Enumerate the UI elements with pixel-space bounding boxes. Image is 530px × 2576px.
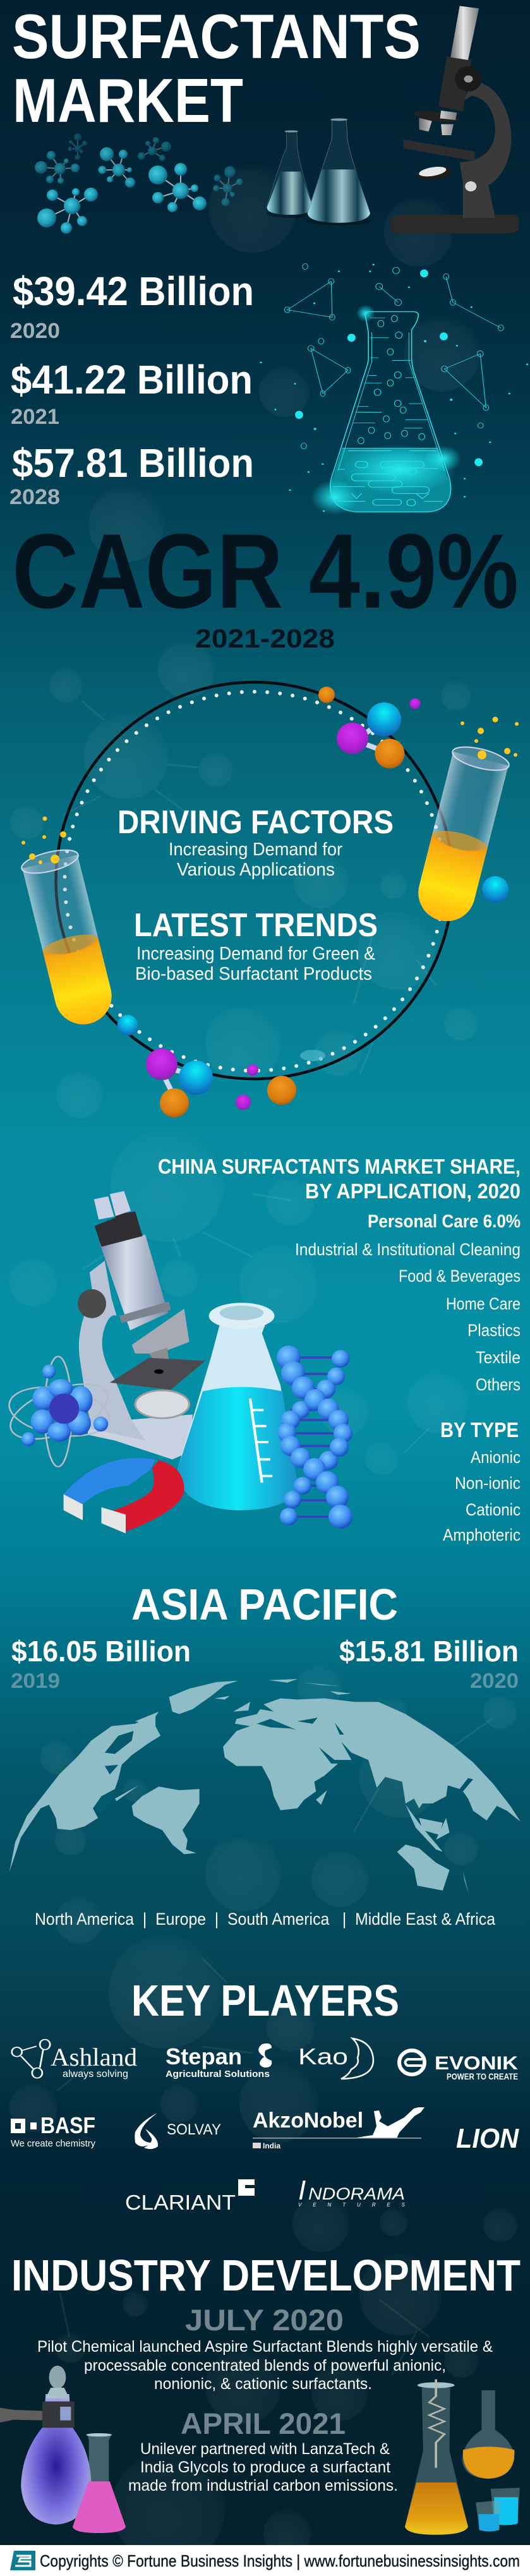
stage [110, 1358, 205, 1390]
pivot [465, 181, 476, 191]
date: July 2020: JULY 2020 [185, 2303, 344, 2337]
atom electrons [21, 1364, 108, 1446]
North America [9, 1714, 160, 1872]
application list [295, 1240, 521, 1394]
flask liquid [178, 1387, 298, 1510]
heading: key players: KEY PLAYERS [131, 1976, 399, 2025]
panel: factors ring [20, 682, 519, 1117]
molecule 7 [213, 166, 243, 206]
text: April 2021: made from industrial carbon emissions. [128, 2477, 398, 2495]
value: 2021: 2021 [11, 405, 59, 429]
value: 2020: 2020 [470, 1669, 519, 1692]
Caribbean [115, 1785, 138, 1801]
text: July 2020: processable concentrated blends of powerful anionic, [84, 2357, 446, 2374]
mirror [416, 164, 455, 183]
yellow droplets [21, 716, 519, 864]
tube band [119, 1301, 171, 1323]
knob centre [464, 75, 473, 83]
text: April 2021: Unilever partnered with LanzaTech & [140, 2440, 390, 2458]
illustration: left glassware [0, 2366, 126, 2533]
world map [9, 1679, 521, 1894]
eyepieces [94, 1191, 131, 1220]
right flask [307, 118, 371, 226]
Arctic islands [135, 1679, 399, 1724]
value: 2019 [11, 1635, 191, 1692]
molecule 1 [37, 188, 98, 234]
flask rim [209, 1303, 274, 1329]
logo: Indorama: V E N T U R E S [298, 2202, 406, 2208]
flask [178, 1325, 298, 1510]
molecule 5 [138, 137, 171, 161]
value: 2020 [339, 1635, 519, 1692]
logo: Solvay [135, 2113, 221, 2149]
footer bar [0, 2545, 530, 2576]
value: 2028: 2028 [9, 485, 60, 509]
molecule 4 [35, 151, 80, 184]
text: April 2021: India Glycols to produce a surfactant [140, 2459, 390, 2476]
application list: Plastics [467, 1321, 521, 1340]
logo: Stepan: Agricultural Solutions [166, 2069, 270, 2079]
heading: China share [158, 1155, 521, 1203]
logo: Ashland: Ashland [51, 2043, 137, 2071]
value: 2020 [10, 268, 254, 343]
logo: Indorama [298, 2175, 406, 2208]
black tube [438, 56, 471, 112]
clamp [0, 2402, 75, 2428]
atom nucleus [31, 1379, 93, 1441]
type list: Cationic [466, 1500, 521, 1519]
inland seas [95, 1718, 344, 1813]
application list: Textile [476, 1348, 521, 1367]
liquid [330, 448, 451, 512]
objective [148, 1348, 169, 1365]
atoms [117, 687, 509, 1110]
logo: Clariant [125, 2179, 255, 2214]
heading: latest trends: LATEST TRENDS [134, 907, 378, 944]
ring [56, 682, 452, 1079]
application list: Others [476, 1375, 521, 1394]
molecule 6 [68, 133, 87, 160]
eyepiece collar [95, 1212, 143, 1247]
value: 2028 [9, 440, 254, 509]
icon: right test tube [412, 742, 511, 927]
base [390, 215, 519, 234]
light [135, 1390, 190, 1418]
value: 2019: $16.05 Billion [11, 1635, 191, 1668]
logo: Indorama: NDORAMA [308, 2184, 405, 2203]
Africa [223, 1724, 338, 1810]
round flask [462, 2390, 514, 2479]
text: latest trends: Increasing Demand for Green & [136, 944, 375, 964]
value: 2020: 2020 [10, 319, 60, 343]
SE Asia islands [406, 1805, 450, 1852]
Eurasia [235, 1699, 521, 1822]
logo: Indorama: I [298, 2175, 306, 2206]
microscope base [88, 1414, 193, 1459]
text: July 2020: nonionic, & cationic surfactants. [154, 2375, 372, 2393]
heading: driving factors: DRIVING FACTORS [117, 804, 394, 841]
New Zealand [463, 1871, 469, 1894]
title [12, 1, 421, 135]
flask mouth [220, 1306, 263, 1320]
logo: AkzoNobel [253, 2107, 425, 2150]
icon: glass flasks [267, 118, 371, 226]
magnet [64, 1458, 184, 1533]
icon: molecules [35, 133, 243, 234]
molecule: bottom [146, 1049, 213, 1117]
icon: neon flask [260, 263, 528, 515]
icon: footer logo [10, 2551, 35, 2570]
logo: Stepan: Stepan [166, 2043, 242, 2069]
type list [443, 1448, 521, 1544]
stage hole [154, 1369, 164, 1374]
heading: by type: BY TYPE [440, 1418, 519, 1441]
CAGR period: 2021-2028 [195, 623, 335, 653]
panel: China market share list [158, 1155, 521, 1544]
flask scale [250, 1399, 272, 1483]
microscope arm [79, 1261, 145, 1441]
pink flask [73, 2433, 126, 2533]
date: April 2021: APRIL 2021 [181, 2407, 346, 2440]
type list: Anionic [471, 1448, 521, 1467]
logo: Ashland: always solving [63, 2069, 128, 2079]
focus knob [78, 1289, 106, 1318]
dotted ring [64, 692, 443, 1071]
arm [460, 81, 511, 218]
purple flask [21, 2366, 91, 2525]
small beaker [476, 2500, 500, 2531]
knob [455, 66, 482, 92]
Australia [397, 1845, 450, 1891]
title: MARKET [13, 66, 243, 135]
type list: Non-ionic [455, 1474, 521, 1493]
glowing dots [260, 264, 528, 512]
text: latest trends [135, 944, 375, 984]
objective plate [413, 109, 461, 124]
nosepiece [132, 1309, 190, 1354]
objectives [419, 111, 457, 135]
molecule 3 [99, 147, 135, 188]
logo: AkzoNobel: India [263, 2141, 280, 2150]
text: July 2020: Pilot Chemical launched Aspire Surfactant Blends highly versatile & [37, 2338, 493, 2356]
text: latest trends: Bio-based Surfactant Products [135, 964, 372, 984]
type list: Amphoteric [443, 1526, 521, 1544]
stage [403, 140, 475, 161]
value: 2021 [11, 357, 253, 429]
logo: Evonik: EVONIK [435, 2053, 518, 2074]
condenser flask [405, 2380, 468, 2535]
value: 2028: $57.81 Billion [12, 440, 254, 486]
heading: Asia Pacific: ASIA PACIFIC [131, 1580, 398, 1629]
logo: Lion: LION [456, 2123, 519, 2154]
icon: left test tube [20, 845, 118, 1030]
illustration: lab equipment [1, 1191, 298, 1533]
text: driving factors: Increasing Demand for [169, 840, 342, 860]
illustration: right glassware [405, 2380, 520, 2535]
logo: Solvay: SOLVAY [167, 2121, 221, 2138]
bubbles [358, 315, 425, 444]
value: 2019: 2019 [11, 1669, 60, 1692]
dashes [353, 318, 428, 428]
logo: Ashland [12, 2040, 137, 2079]
value: 2021: $41.22 Billion [11, 357, 253, 402]
logo: Kao [298, 2038, 373, 2079]
Greenland [169, 1681, 238, 1714]
title: SURFACTANTS [12, 1, 421, 71]
logo: BASF: We create chemistry [11, 2138, 95, 2149]
logo: Kao: Kao [298, 2043, 348, 2069]
microscope tube [100, 1234, 168, 1330]
text: driving factors: Various Applications [177, 860, 335, 880]
constellations [284, 263, 503, 449]
molecule 2 [148, 163, 207, 212]
left flask [267, 130, 313, 218]
atom orbits [1, 1356, 117, 1467]
logo: Clariant: CLARIANT [125, 2191, 236, 2214]
Madagascar [316, 1790, 327, 1805]
logo: AkzoNobel: AkzoNobel [253, 2109, 363, 2133]
icon: DNA [277, 1345, 352, 1529]
logo: BASF [11, 2112, 95, 2149]
value: 2020: $15.81 Billion [339, 1635, 519, 1668]
silver tube [450, 6, 479, 60]
region list: North America | Europe | South America | Middle East & Africa [35, 1910, 496, 1929]
icon: microscope [390, 6, 519, 234]
mirror glass [417, 165, 448, 178]
logo: Evonik [399, 2050, 518, 2081]
text: July 2020 [37, 2338, 493, 2393]
liquid pattern [333, 451, 443, 506]
logo: Stepan [166, 2043, 272, 2079]
glow [341, 444, 456, 495]
South America [132, 1786, 200, 1854]
logo: BASF: BASF [40, 2112, 95, 2138]
text: driving factors [169, 840, 342, 880]
inner outline [338, 332, 445, 471]
value: 2020: $39.42 Billion [13, 268, 254, 314]
molecule: top right [337, 702, 404, 768]
text: April 2021 [128, 2440, 398, 2495]
flask outline [330, 311, 451, 512]
large beaker [491, 2488, 520, 2525]
UK [233, 1702, 250, 1712]
heading: China share: BY APPLICATION, 2020 [305, 1179, 521, 1203]
